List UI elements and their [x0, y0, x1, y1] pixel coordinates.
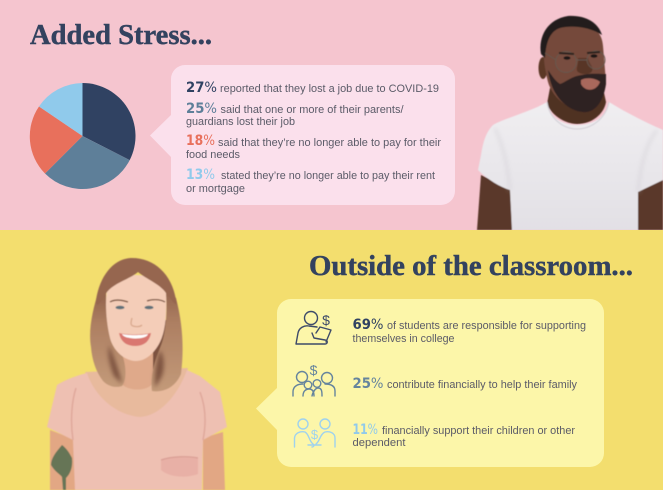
stat: 18%: food needs — [186, 149, 241, 161]
icon: person reading with dollar sign: $ — [322, 312, 330, 328]
icon: person reading with dollar sign — [296, 312, 331, 344]
stat: 18%: 18% — [186, 133, 215, 149]
icon: adults supporting child with dollar sign — [294, 419, 335, 447]
stat: 25% — [352, 376, 578, 392]
callout: financial responsibility statistics — [256, 299, 604, 467]
stat: 25%: contribute financially to help their family — [387, 379, 578, 391]
stat: 69%: of students are responsible for supporting — [387, 320, 586, 332]
stat: 13%: 13% — [186, 167, 215, 183]
stat: 18%: said that they’re no longer able to pay for their — [218, 137, 441, 149]
stat: 27%: reported that they lost a job due to COVID-19 — [220, 83, 439, 95]
icon: family with dollar sign — [293, 362, 335, 396]
heading: added stress: Added Stress... — [30, 20, 212, 51]
heading: outside of the classroom: Outside of the classroom... — [309, 251, 633, 282]
stat: 25%: guardians lost their job — [186, 116, 295, 128]
icon: adults supporting child with dollar sign: $ — [311, 427, 319, 442]
stat: 13%: or mortgage — [186, 183, 245, 195]
photo: concerned man in white t-shirt — [477, 16, 663, 230]
stat: 11% — [352, 422, 575, 449]
stat: 25% — [186, 101, 404, 128]
stat: 25%: 25% — [352, 376, 384, 392]
stat: 25%: 25% — [186, 101, 217, 117]
panel: outside of the classroom — [0, 230, 663, 490]
stat: 13% — [186, 167, 435, 195]
callout: job loss statistics — [150, 65, 455, 205]
stat: 11%: 11% — [352, 422, 378, 438]
stat: 69% — [352, 317, 586, 345]
stat: 11%: financially support their children or other — [382, 425, 575, 437]
stat: 18% — [186, 133, 441, 161]
pie chart — [30, 83, 135, 189]
icon: family with dollar sign: $ — [310, 362, 318, 378]
stat: 69%: themselves in college — [352, 333, 454, 345]
stat: 13%: stated they’re no longer able to pay their rent — [221, 170, 435, 182]
stat: 11%: dependent — [352, 437, 406, 449]
stat: 69%: 69% — [352, 317, 384, 333]
panel: added stress — [0, 0, 663, 230]
stat: 25%: said that one or more of their parents/ — [220, 104, 404, 116]
photo: smiling woman in pink t-shirt — [47, 258, 227, 490]
stat: 27%: 27% — [186, 80, 217, 96]
stat: 27% — [186, 80, 439, 96]
